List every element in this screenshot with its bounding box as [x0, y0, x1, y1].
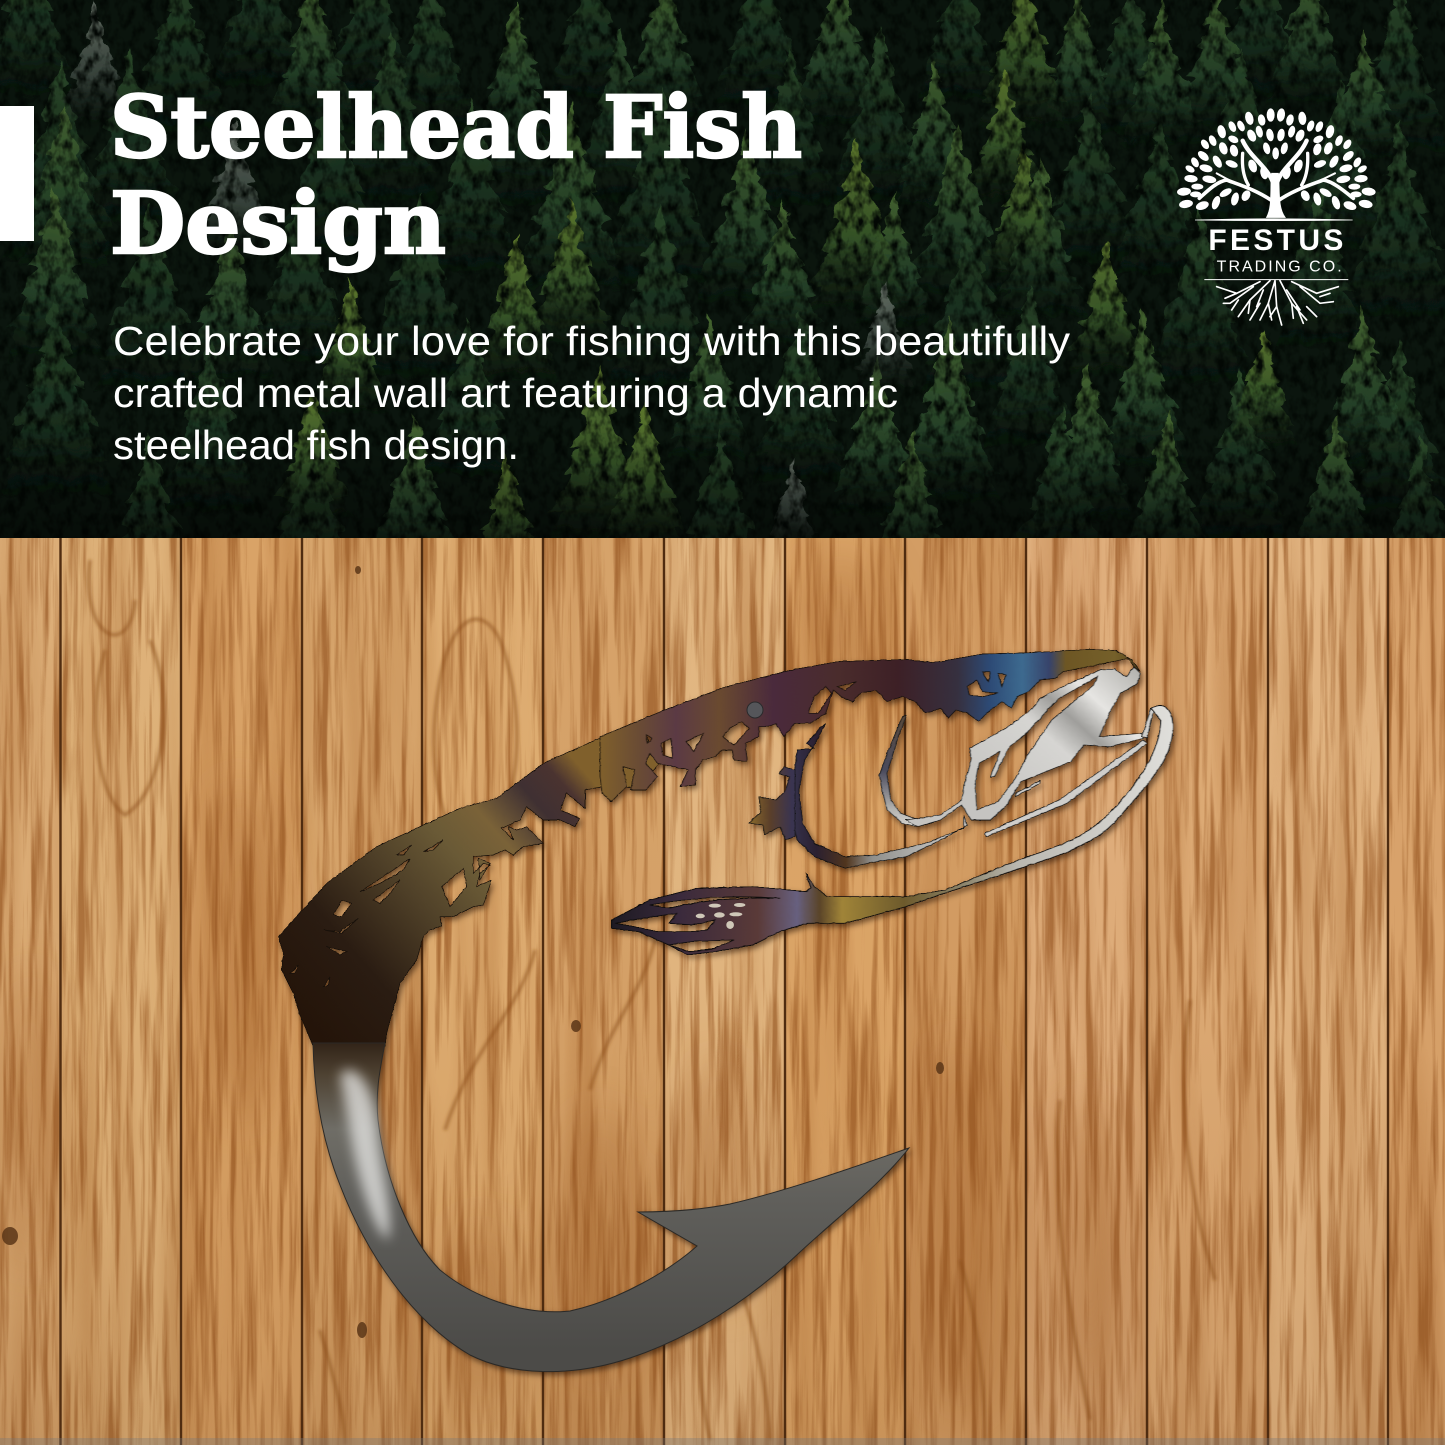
- darker wood patches: [2, 550, 1130, 1420]
- description text: steelhead fish design.: [113, 422, 519, 468]
- screw: [747, 702, 763, 718]
- gill plate thin edge: [879, 715, 937, 827]
- gill collar: [789, 723, 967, 868]
- title: Design: [110, 174, 446, 274]
- spot cluster by collar: [749, 767, 795, 840]
- icon: tree leaves: [1177, 108, 1376, 212]
- icon: roots: [1217, 281, 1338, 325]
- title: [110, 78, 802, 274]
- icon: tree trunk and branches: [1199, 141, 1353, 217]
- metal steelhead fish wall art: [278, 649, 1173, 1372]
- description text: crafted metal wall art featuring a dynamic: [113, 370, 898, 416]
- hook tail: [313, 1043, 909, 1372]
- description text: [113, 318, 1071, 468]
- logo wordmark: FESTUS: [1208, 224, 1343, 257]
- logo tagline: TRADING CO.: [1217, 259, 1342, 276]
- lower jaw, belly and pectoral fin: [611, 706, 1173, 955]
- divider: [1195, 219, 1353, 221]
- silver mouth line: [985, 706, 1163, 837]
- wood knots: [2, 566, 944, 1338]
- body back with dappled spots: [600, 649, 1140, 802]
- accent bar: [0, 106, 34, 241]
- tail section of body: [278, 737, 660, 1047]
- silver gill plate and cheek: [906, 667, 1143, 827]
- background: aerial forest: [0, 0, 1445, 538]
- fin spots: [696, 903, 745, 929]
- divider: [1204, 278, 1348, 281]
- background: wood planks: [0, 538, 1445, 1445]
- logo: Festus Trading Co.: [1177, 108, 1376, 325]
- description text: Celebrate your love for fishing with this beautifully: [113, 318, 1071, 364]
- title: Steelhead Fish: [110, 78, 802, 178]
